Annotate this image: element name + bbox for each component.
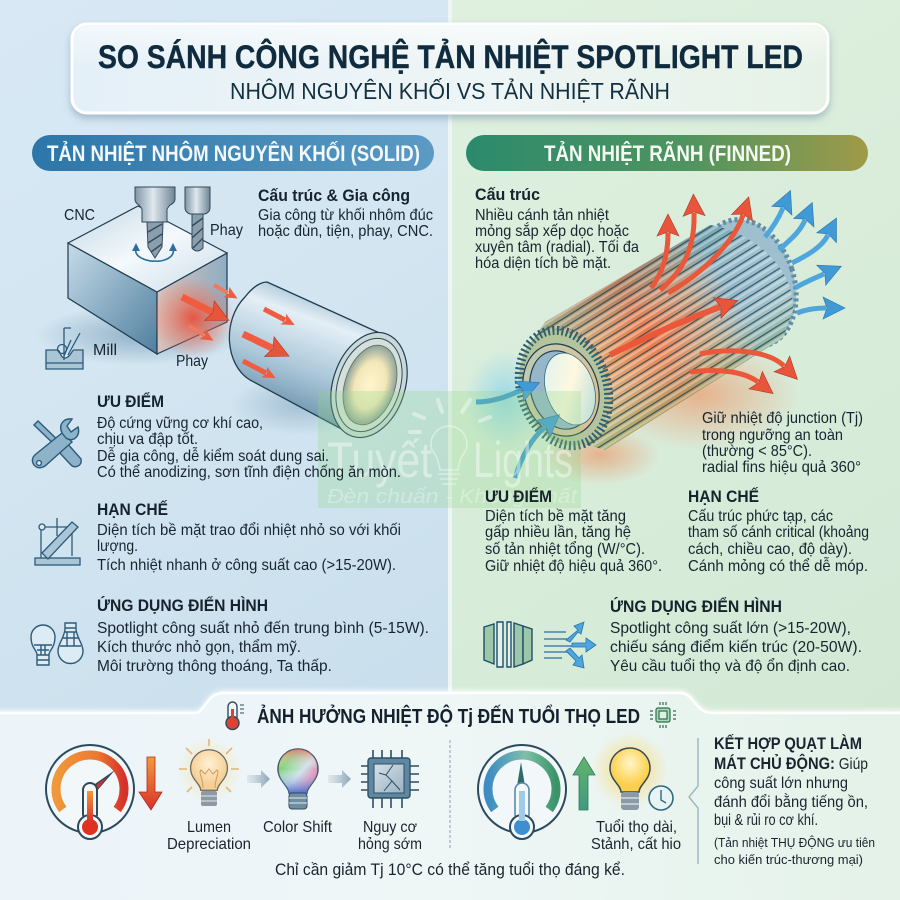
text block: active cooling: (Tản nhiệt THỤ ĐỘNG ưu tiên (714, 835, 875, 850)
labels: machining: Phay (176, 353, 208, 370)
text block: advantages solid: chịu va đập tốt. (97, 431, 198, 448)
text block: active cooling: công suất lớn nhưng (714, 775, 848, 792)
text block: active cooling: MÁT CHỦ ĐỘNG: Giúp (714, 754, 868, 773)
icon: tools (32, 419, 81, 468)
text block: advantages solid: Dễ gia công, dễ kiểm soát dung sai. (97, 446, 329, 465)
text block: limits solid: HẠN CHẾ (97, 500, 168, 519)
text block: applications finned: Yêu cầu tuổi thọ và độ ổn định cao. (610, 657, 850, 675)
labels: failure modes: hỏng sớm (358, 836, 422, 853)
icon: milling symbol (46, 328, 83, 369)
text block: limits finned: tham số cánh critical (khoảng (688, 524, 869, 541)
text block: limits solid: lượng. (97, 538, 138, 555)
text block: applications finned: ỨNG DỤNG ĐIỂN HÌNH (610, 597, 782, 616)
text block: advantages solid (97, 392, 401, 481)
labels: machining: Mill (93, 342, 117, 359)
icon: small milling bit (185, 187, 210, 251)
labels: machining: Phay (210, 222, 243, 239)
text block: applications solid: Kích thước nhỏ gọn, thẩm mỹ. (97, 638, 301, 656)
watermark (318, 391, 581, 508)
text block: structure finned: mỏng sắp xếp dọc hoặc (475, 221, 629, 240)
illustration: machined aluminium block with CNC drills (35, 187, 245, 365)
illustration: solid aluminium cylinder (229, 282, 420, 447)
labels: failure modes (167, 819, 422, 853)
text block: active cooling: bụi & rủi ro cơ khí. (714, 812, 818, 829)
text block: applications solid: Spotlight công suất nhỏ đến trung bình (5-15W). (97, 620, 429, 637)
arrow: cool air leaving (765, 208, 828, 313)
text block: active cooling: cho kiến trúc-thương mại) (714, 852, 863, 867)
icon: cracked chip (361, 750, 419, 808)
icon: RGB bulb (278, 749, 318, 809)
watermark: Lights (473, 432, 573, 488)
text block: applications solid: ỨNG DỤNG ĐIỂN HÌNH (97, 596, 268, 615)
text block: limits finned: Cánh mỏng có thể dễ móp. (688, 556, 868, 575)
text block: structure solid (258, 186, 433, 240)
icon: large drill bit (135, 187, 175, 258)
text block: limits finned: cách, chiều cao, độ dày). (688, 541, 852, 558)
text block: applications finned: Spotlight công suất lớn (>15-20W), (610, 620, 851, 637)
arrow: to failure (328, 770, 351, 788)
icon: rotation arrows (132, 243, 177, 261)
icon: two bulbs (31, 623, 83, 665)
text block: structure finned: xuyên tâm (radial). Tối đa (475, 239, 639, 256)
text block: limits finned (688, 487, 869, 575)
text block: advantages solid: Có thể anodizing, sơn tĩnh điện chống ăn mòn. (97, 463, 401, 481)
labels: machining (64, 207, 243, 370)
text block: structure finned: Cấu trúc (475, 185, 540, 204)
icon: thermometer (226, 702, 244, 730)
text block: structure finned: Nhiều cánh tản nhiệt (475, 207, 609, 224)
text block: active cooling: KẾT HỢP QUẠT LÀM (714, 734, 862, 753)
text block: structure solid: Cấu trúc & Gia công (258, 186, 410, 205)
text block: advantages finned: Giữ nhiệt độ hiệu quả 360°. (485, 558, 662, 575)
arrow: cool air entering (476, 390, 545, 478)
labels: machining: CNC (64, 207, 95, 224)
text block: junction temperature: (thường < 85°C). (702, 443, 812, 460)
arrow: heat flow from block (182, 285, 228, 335)
icon: clock (649, 786, 673, 810)
arrow: temperature down (139, 757, 162, 810)
label: long life (591, 818, 681, 853)
heading pill: finned: TẢN NHIỆT RÃNH (FINNED) (544, 141, 791, 166)
text block: structure solid: Gia công từ khối nhôm đúc (258, 207, 433, 224)
text block: limits solid: Tích nhiệt nhanh ở công suất cao (>15-20W). (97, 557, 396, 574)
icon: chip (650, 702, 676, 728)
heading: temperature impact: ẢNH HƯỞNG NHIỆT ĐỘ Tj ĐẾN TUỔI THỌ LED (257, 704, 640, 728)
label: long life: Stảnh, cất hio (591, 836, 681, 853)
watermark: Đèn chuẩn - Không nhất (327, 486, 579, 508)
text block: limits solid (97, 500, 401, 574)
text block: advantages finned: Diện tích bề mặt tăng (485, 508, 626, 525)
text block: advantages solid: Độ cứng vững cơ khí cao, (97, 415, 263, 432)
text block: advantages finned: ƯU ĐIỂM (485, 487, 552, 506)
text block: active cooling (714, 734, 875, 867)
text block: junction temperature: radial fins hiệu quả 360° (702, 459, 861, 476)
arrow: to colour shift (247, 770, 270, 788)
text block: structure finned: hóa diện tích bề mặt. (475, 255, 611, 272)
icon: cool gauge (478, 745, 566, 839)
labels: failure modes: Depreciation (167, 836, 251, 853)
text block: junction temperature: Giữ nhiệt độ junction (Tj) (702, 410, 863, 427)
heading: subtitle: NHÔM NGUYÊN KHỐI VS TẢN NHIỆT RÃNH (230, 76, 670, 104)
text block: limits solid: Diện tích bề mặt trao đổi nhiệt nhỏ so với khối (97, 521, 401, 539)
arrow: hot air rising (610, 213, 784, 382)
watermark: Tuyết (327, 432, 432, 488)
text: takeaway: Chỉ cần giảm Tj 10°C có thể tăng tuổi thọ đáng kể. (275, 861, 625, 879)
arrow: lifetime up (573, 757, 595, 810)
text block: active cooling: đánh đổi bằng tiếng ồn, (714, 792, 868, 811)
text block: advantages finned (485, 487, 662, 575)
text block: advantages finned: số tản nhiệt tổng (W/°C). (485, 540, 645, 558)
labels: failure modes: Color Shift (263, 819, 333, 836)
illustration: finned radial heat sink (465, 207, 828, 485)
heading: main title: SO SÁNH CÔNG NGHỆ TẢN NHIỆT SPOTLIGHT LED (98, 39, 803, 75)
icon: dim bulb (176, 737, 242, 806)
text block: limits finned: HẠN CHẾ (688, 487, 759, 506)
icon: fins with airflow (484, 622, 596, 668)
icon: bright bulb with clock (592, 732, 673, 810)
label: long life: Tuổi thọ dài, (596, 818, 677, 836)
title card (72, 24, 828, 113)
text block: junction temperature: trong ngưỡng an toàn (702, 427, 843, 444)
text block: applications solid (97, 596, 429, 675)
divider with chevron (689, 738, 698, 864)
icon: truss (35, 518, 80, 565)
heading pill: solid (32, 135, 434, 171)
text block: limits finned: Cấu trúc phức tạp, các (688, 508, 833, 525)
text block: advantages solid: ƯU ĐIỂM (97, 392, 164, 411)
labels: failure modes: Nguy cơ (363, 819, 417, 836)
labels: failure modes: Lumen (187, 819, 231, 836)
icon: hot gauge (46, 745, 134, 839)
text block: advantages finned: gấp nhiều lần, tăng hệ (485, 524, 631, 541)
text block: applications finned: chiếu sáng điểm kiến trúc (20-50W). (610, 638, 862, 656)
text block: structure finned (475, 185, 639, 272)
text block: junction temperature (702, 410, 863, 476)
text block: applications solid: Môi trường thông thoáng, Ta thấp. (97, 658, 332, 675)
heading pill: solid: TẢN NHIỆT NHÔM NGUYÊN KHỐI (SOLID) (47, 140, 420, 166)
text block: applications finned (610, 597, 862, 675)
arrow: heat flow through cylinder (243, 309, 285, 373)
text block: structure solid: hoặc đùn, tiện, phay, CNC. (258, 223, 433, 240)
panel: temperature impact (0, 693, 900, 900)
heading pill: finned (466, 135, 868, 171)
icon: front ring and lens (511, 334, 611, 446)
